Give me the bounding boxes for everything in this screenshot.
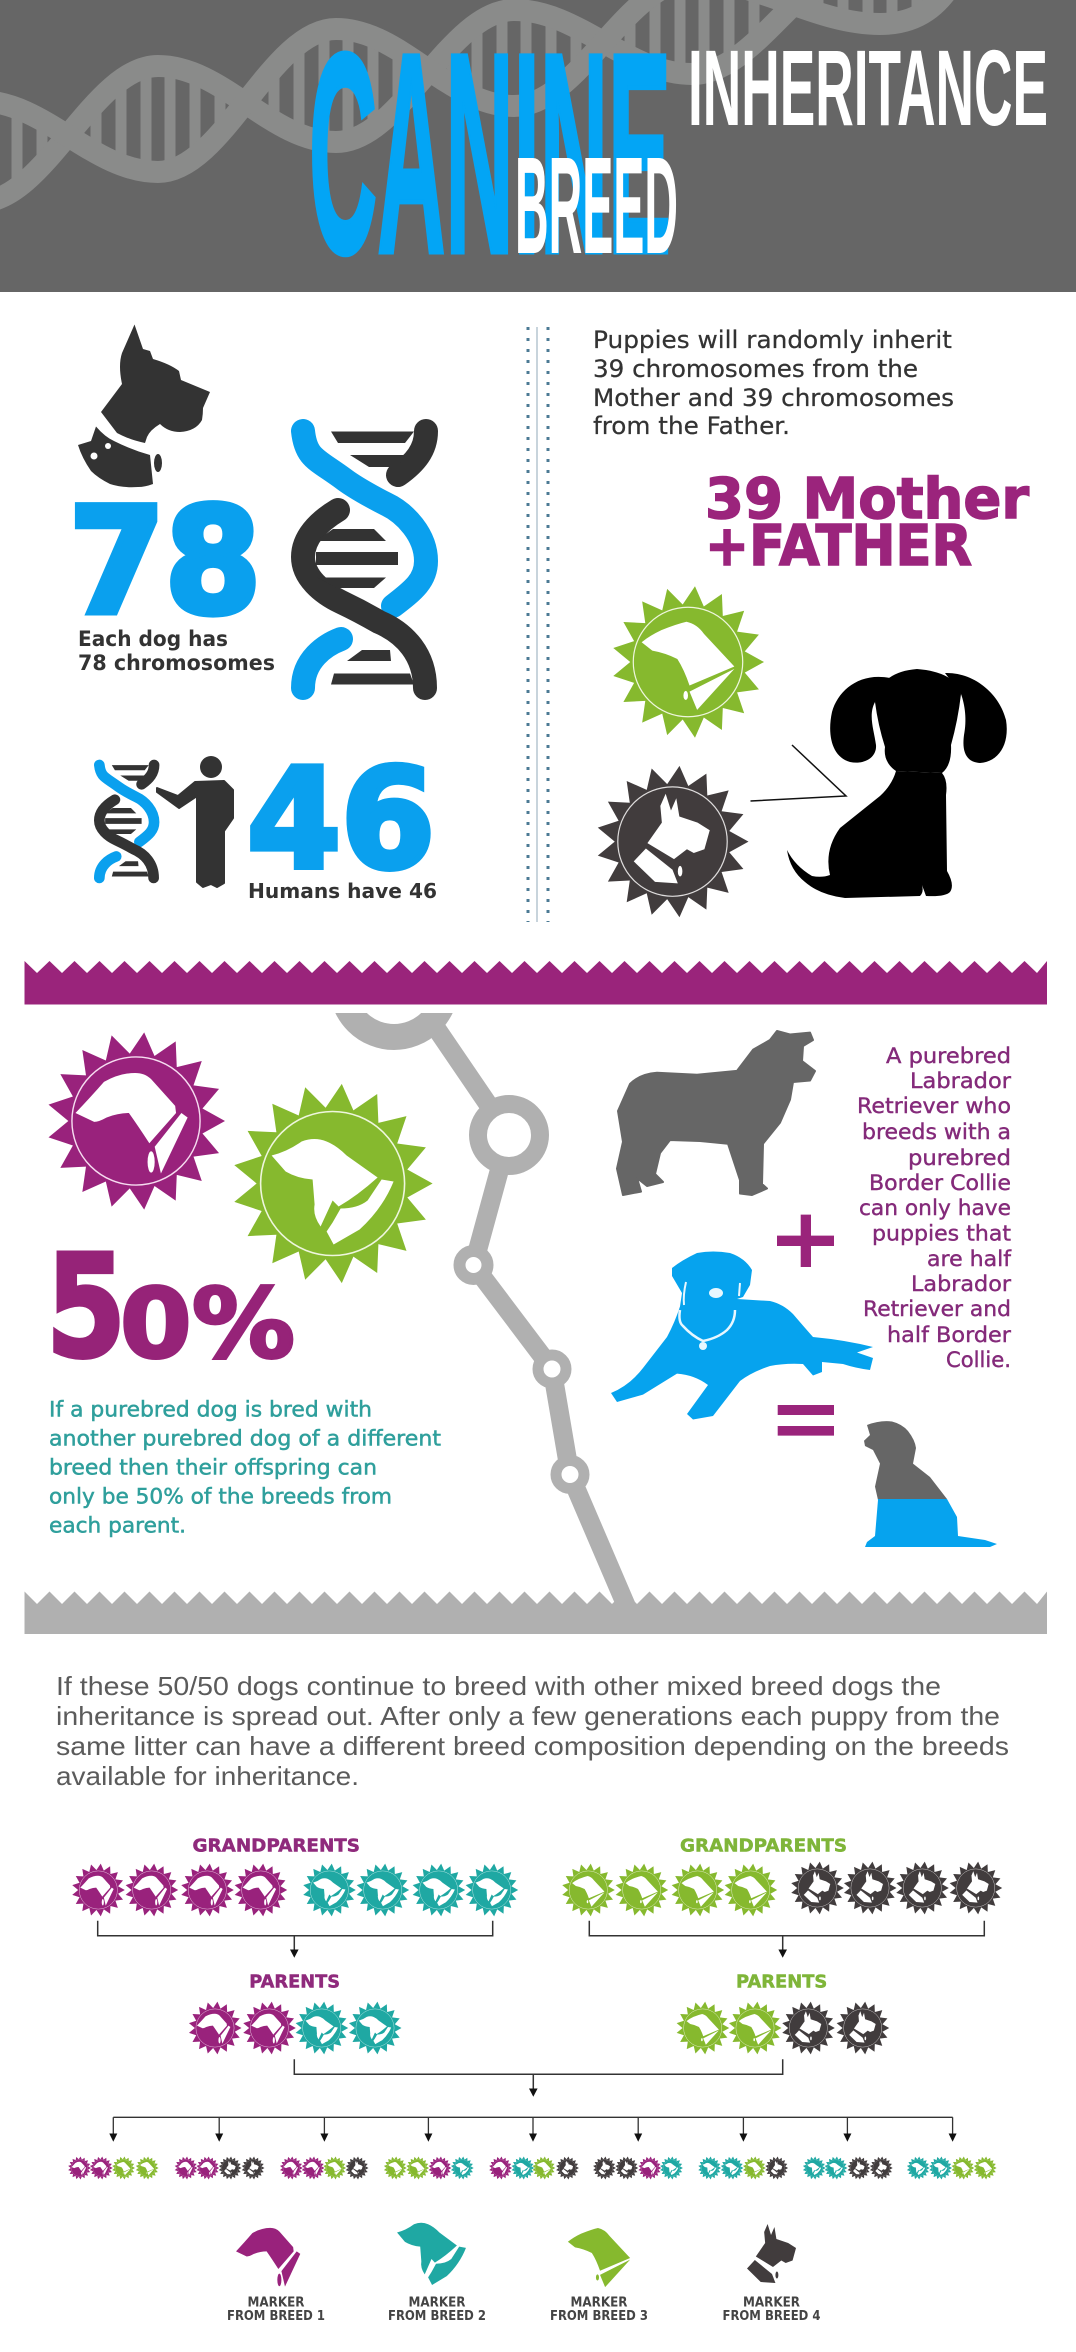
icon: half and half puppy xyxy=(864,1421,997,1547)
text: labrador and collie: Retriever and xyxy=(863,1297,1011,1321)
icon: person pointing xyxy=(157,756,233,887)
panel: legend markers xyxy=(227,2223,820,2324)
icon: small DNA helix xyxy=(99,765,154,878)
row: puppy badge groups xyxy=(68,2157,997,2179)
row: left parents badges xyxy=(189,2002,402,2054)
icon: equals sign xyxy=(778,1405,834,1436)
label: marker from breed 4: MARKER xyxy=(743,2296,800,2310)
icon: marker from breed 2 xyxy=(397,2223,466,2285)
icon: marker from breed 4 xyxy=(747,2224,796,2283)
text: purebred explanation: each parent. xyxy=(49,1514,186,1538)
text: mixed breed paragraph xyxy=(56,1671,1009,1791)
heading: 39 mother + father xyxy=(705,467,1029,579)
text: puppies inherit: from the Father. xyxy=(593,412,790,440)
text: labrador and collie: Retriever who xyxy=(857,1094,1011,1118)
heading: parents right: PARENTS xyxy=(736,1972,827,1992)
row: right parents badges xyxy=(677,2002,889,2054)
icon: grey border collie xyxy=(617,1031,815,1195)
arrow: parents to puppies xyxy=(294,2059,783,2097)
text: puppies inherit: 39 chromosomes from the xyxy=(593,355,918,383)
text: purebred explanation: breed then their offspring can xyxy=(49,1456,377,1480)
text: mixed breed paragraph: If these 50/50 dogs continue to breed with other mixed breed dogs the xyxy=(56,1671,941,1701)
icon: green breed badge xyxy=(613,586,764,738)
text: puppies inherit xyxy=(593,326,954,440)
text: humans have 46: Humans have 46 xyxy=(248,879,437,903)
label: marker from breed 1: FROM BREED 1 xyxy=(227,2309,325,2324)
purple zigzag band xyxy=(24,961,1047,1004)
number 50 percent xyxy=(46,1225,295,1390)
icon: dog head with collar xyxy=(78,324,210,487)
arrow: distribution to nine puppies xyxy=(109,2117,957,2142)
text: purebred explanation: another purebred dog of a different xyxy=(49,1426,441,1452)
text: mixed breed paragraph: same litter can have a different breed composition depending on the breeds xyxy=(56,1731,1009,1761)
background DNA helix xyxy=(0,0,970,210)
text: labrador and collie xyxy=(857,1044,1012,1372)
text: puppies inherit: Puppies will randomly inherit xyxy=(593,326,952,354)
grey chain of rings xyxy=(342,933,628,1610)
text: labrador and collie: purebred xyxy=(908,1146,1011,1170)
row: right grandparents badges xyxy=(562,1862,1002,1916)
text: labrador and collie: puppies that xyxy=(872,1222,1011,1246)
icon: dark breed badge xyxy=(598,766,748,917)
number 50 percent: 5 xyxy=(46,1225,126,1390)
panel: inherited chromosomes xyxy=(593,326,1029,917)
label: marker from breed 4 xyxy=(722,2296,820,2324)
number 78: 78 xyxy=(69,477,261,647)
text: labrador and collie: are half xyxy=(927,1247,1012,1271)
arrow: left grandparents to parents xyxy=(98,1921,493,1958)
text: each dog has 78 chromosomes: Each dog has xyxy=(78,627,228,651)
label: marker from breed 1 xyxy=(227,2296,325,2324)
panel: 50 percent xyxy=(46,1032,441,1538)
icon: marker from breed 3 xyxy=(568,2228,630,2287)
icon: purple breed badge xyxy=(49,1032,225,1210)
heading: grandparents right: GRANDPARENTS xyxy=(680,1836,847,1856)
heading: 39 mother + father: 39 Mother xyxy=(705,467,1029,532)
text: purebred explanation xyxy=(49,1398,441,1538)
heading: 39 mother + father: +FATHER xyxy=(705,514,972,579)
text: puppies inherit: Mother and 39 chromosomes xyxy=(593,384,954,412)
icon: green breed badge xyxy=(234,1084,433,1283)
label: marker from breed 4: FROM BREED 4 xyxy=(722,2309,820,2324)
number 50 percent: 0% xyxy=(120,1268,295,1380)
icon: blue labrador xyxy=(611,1252,873,1420)
label: marker from breed 3 xyxy=(550,2296,648,2324)
label: marker from breed 2 xyxy=(388,2296,486,2324)
header banner: BREED xyxy=(515,129,678,283)
arrow: pointer lines xyxy=(750,745,846,801)
text: purebred explanation: only be 50% of the breeds from xyxy=(49,1484,392,1510)
text: labrador and collie: half Border xyxy=(887,1323,1011,1347)
icon: black puppy silhouette xyxy=(787,669,1007,898)
text: labrador and collie: A purebred xyxy=(886,1044,1011,1068)
text: labrador and collie: Collie. xyxy=(946,1348,1011,1372)
label: marker from breed 2: FROM BREED 2 xyxy=(388,2309,486,2324)
text: purebred explanation: If a purebred dog is bred with xyxy=(49,1398,372,1422)
row: left grandparents badges xyxy=(72,1864,518,1916)
grey zigzag band xyxy=(24,1592,1047,1634)
heading: grandparents left: GRANDPARENTS xyxy=(192,1836,360,1856)
panel: family tree xyxy=(68,1836,1002,2179)
text: labrador and collie: Labrador xyxy=(911,1272,1011,1296)
icon: marker from breed 1 xyxy=(236,2228,300,2287)
text: labrador and collie: Labrador xyxy=(910,1069,1011,1093)
text: labrador and collie: can only have xyxy=(859,1196,1011,1220)
icon: plus sign xyxy=(777,1215,834,1267)
arrow: right grandparents to parents xyxy=(589,1921,984,1958)
text: mixed breed paragraph: inheritance is spread out. After only a few generations each puppy from the xyxy=(56,1701,1000,1731)
label: marker from breed 2: MARKER xyxy=(408,2296,466,2310)
panel: labrador plus collie xyxy=(611,1031,1012,1547)
heading: parents left: PARENTS xyxy=(249,1972,340,1992)
label: marker from breed 1: MARKER xyxy=(248,2296,304,2310)
icon: large DNA helix xyxy=(303,431,426,688)
text: each dog has 78 chromosomes xyxy=(78,627,275,675)
panel: chromosome counts xyxy=(69,324,437,903)
label: marker from breed 3: MARKER xyxy=(570,2296,628,2310)
text: mixed breed paragraph: available for inheritance. xyxy=(56,1761,359,1791)
number 46: 46 xyxy=(247,739,435,900)
text: labrador and collie: Border Collie xyxy=(869,1171,1011,1195)
text: labrador and collie: breeds with a xyxy=(862,1120,1011,1144)
label: marker from breed 3: FROM BREED 3 xyxy=(550,2309,648,2324)
text: each dog has 78 chromosomes: 78 chromosomes xyxy=(78,651,275,675)
